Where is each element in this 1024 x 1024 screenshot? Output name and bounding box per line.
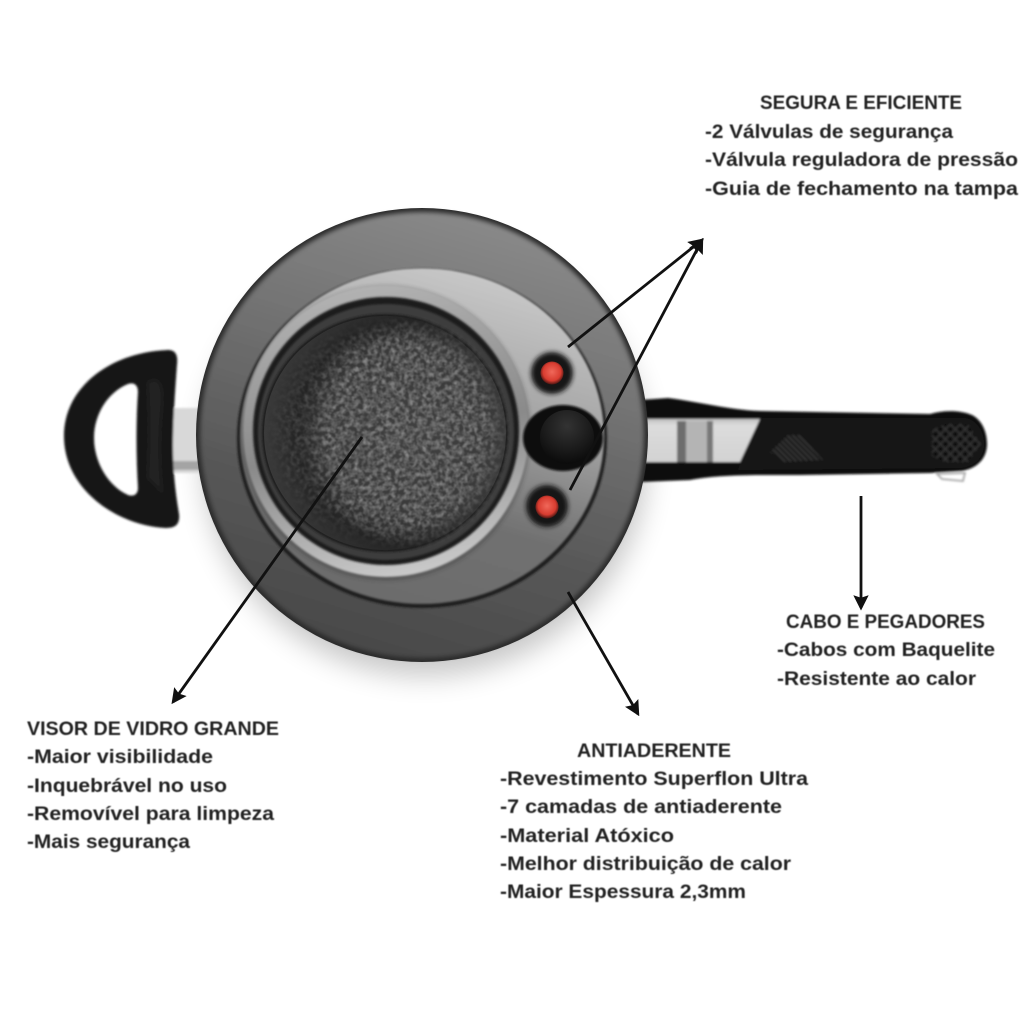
faint texture across the whole glass bbox=[276, 328, 493, 536]
central pressure regulator knob bbox=[523, 405, 603, 471]
non-stick texture seen through glass bbox=[312, 321, 508, 546]
upper valve bbox=[531, 352, 573, 394]
text block: safety: -2 Válvulas de segurança bbox=[705, 121, 953, 143]
text block: non-stick: -Melhor distribuição de calor bbox=[500, 853, 791, 875]
arrow: safety valve lower bbox=[570, 240, 702, 490]
text block: glass window: -Inquebrável no uso bbox=[27, 775, 227, 797]
text block: non-stick: -7 camadas de antiaderente bbox=[500, 796, 782, 818]
arrow: safety valve upper bbox=[568, 240, 702, 347]
text block: safety: -Guia de fechamento na tampa bbox=[705, 178, 1018, 200]
text block: glass window bbox=[27, 718, 279, 853]
text block: handles: -Cabos com Baquelite bbox=[777, 639, 995, 661]
lower valve bbox=[526, 485, 568, 527]
cooker drop shadow bbox=[203, 240, 647, 676]
pressure cooker product illustration bbox=[64, 208, 987, 676]
text block: safety: -Válvula reguladora de pressão bbox=[705, 149, 1018, 171]
text block: non-stick: -Maior Espessura 2,3mm bbox=[500, 881, 746, 903]
outer pan body with non-stick rim bbox=[196, 208, 648, 662]
text block: non-stick: -Material Atóxico bbox=[500, 825, 674, 847]
arrow: glass window bbox=[173, 437, 362, 702]
text block: handles: -Resistente ao calor bbox=[777, 668, 976, 690]
text block: non-stick: ANTIADERENTE bbox=[577, 740, 731, 762]
side helper handle bbox=[64, 350, 205, 528]
arrow: handles bbox=[860, 496, 862, 608]
text block: glass window: VISOR DE VIDRO GRANDE bbox=[27, 718, 279, 740]
text block: glass window: -Removível para limpeza bbox=[27, 803, 274, 825]
text block: non-stick bbox=[500, 740, 808, 903]
text block: glass window: -Mais segurança bbox=[27, 831, 190, 853]
long main handle bbox=[607, 398, 987, 482]
arrow: non-stick bbox=[568, 592, 638, 714]
text block: non-stick: -Revestimento Superflon Ultra bbox=[500, 768, 808, 790]
infographic canvas bbox=[26, 94, 1019, 903]
lid bbox=[237, 268, 607, 608]
text block: handles bbox=[777, 611, 995, 690]
text block: safety bbox=[705, 92, 1018, 200]
text block: glass window: -Maior visibilidade bbox=[27, 746, 213, 768]
text block: handles: CABO E PEGADORES bbox=[786, 611, 985, 633]
text block: safety: SEGURA E EFICIENTE bbox=[760, 92, 962, 114]
glass viewing window bbox=[242, 285, 530, 580]
